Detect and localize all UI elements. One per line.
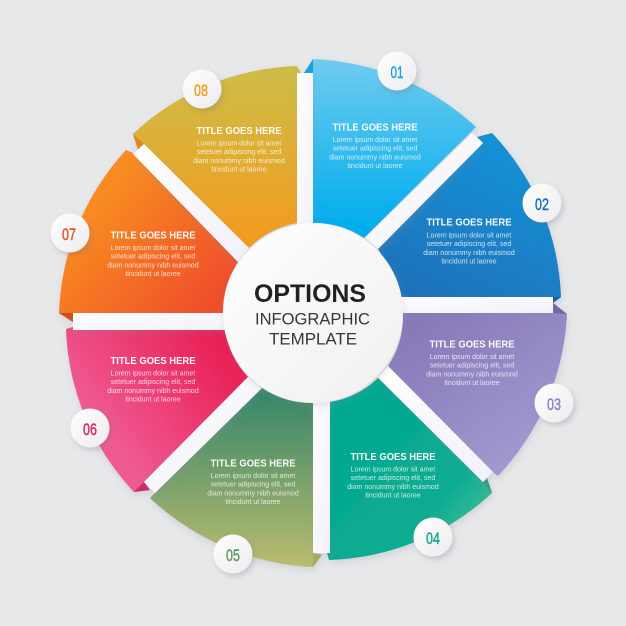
text block: option 03: TITLE GOES HERE [430,340,515,350]
text block: option 04: Lorem ipsum dolor sit amet [351,466,435,474]
text block: option 04 [347,452,439,500]
text block: option 03: diam nonummy nibh euismod [426,371,518,378]
text block: option 02: diam nonummy nibh euismod [423,250,515,257]
text block: option 04: setetuer adipiscing elit, sed [351,475,435,482]
text block: option 02: Lorem ipsum dolor sit amet [427,232,511,240]
text block: option 01: Lorem ipsum dolor sit amet [333,137,417,144]
badge 01 [378,52,416,90]
text block: option 05: Lorem ipsum dolor sit amet [211,473,295,480]
text block: option 02: TITLE GOES HERE [426,218,512,228]
badge 06 [70,408,110,448]
badge 02: 02 [535,195,549,214]
text block: option 01: setetuer adipiscing elit, sed [333,146,417,153]
text block: option 01 [329,122,421,170]
text block: option 07: tincidunt ut laoree [125,271,181,278]
badge 03: 03 [547,395,561,414]
badge 07: 07 [62,225,76,244]
text block: option 07: Lorem ipsum dolor sit amet [111,245,195,252]
panel: option 01 segment [313,59,476,238]
text block: option 04: TITLE GOES HERE [350,452,436,463]
badge 02 [522,184,562,222]
panel: option 04 segment [327,378,492,560]
text block: option 03: tincidunt ut laoree [444,380,500,387]
text block: option 02: tincidunt ut laoree [441,258,497,266]
badge 04: 04 [426,529,440,548]
text block: option 07 [107,230,199,278]
text block: option 03 [426,340,518,387]
text block: option 06: Lorem ipsum dolor sit amet [111,370,195,378]
text block: option 01: diam nonummy nibh euismod [329,154,421,161]
central hub circle [223,223,403,403]
text block: option 06: tincidunt ut laoree [125,396,181,404]
badge 04 [414,518,452,556]
text block: option 01: TITLE GOES HERE [332,122,418,134]
panel: option 02 segment [378,133,561,303]
text block: option 06 [107,356,199,404]
text block: option 04: tincidunt ut laoree [365,492,421,500]
text block: option 02: setetuer adipiscing elit, sed [427,241,511,248]
badge 07 [50,214,90,252]
text block: option 06: diam nonummy nibh euismod [107,388,199,395]
text block: option 07: setetuer adipiscing elit, sed [111,254,195,261]
panel: option 05 segment [150,388,322,567]
text block: option 01: tincidunt ut laoree [347,163,403,170]
heading: TEMPLATE: TEMPLATE [269,329,357,348]
badge 05 [214,534,252,574]
badge 08: 08 [194,81,208,100]
badge 05: 05 [226,546,240,565]
white dividers [73,73,553,553]
text block: option 08: TITLE GOES HERE [196,126,282,137]
panel: option 06 segment [66,327,248,492]
text block: option 03: setetuer adipiscing elit, sed [430,363,514,370]
text block: option 04: diam nonummy nibh euismod [347,484,439,491]
badge 01: 01 [390,63,404,82]
text block: option 08: diam nonummy nibh euismod [193,158,285,165]
panel: option 07 segment [59,150,238,322]
text block: option 08: tincidunt ut laoree [211,166,267,174]
text block: option 02 [423,218,515,266]
heading: INFOGRAPHIC: INFOGRAPHIC [255,309,370,328]
panel: option 03 segment [388,303,567,476]
badge 06: 06 [83,420,97,439]
text block: option 06: setetuer adipiscing elit, sed [111,379,195,386]
badge 03 [534,384,574,422]
text block: option 05 [207,458,299,506]
text block: option 05: diam nonummy nibh euismod [207,490,299,497]
heading: OPTIONS: OPTIONS [254,280,366,308]
text block: option 05: tincidunt ut laoree [225,499,281,506]
panel: option 08 segment [133,66,301,248]
text block: option 08 [193,126,285,174]
badge 08 [182,70,222,108]
text block: option 06: TITLE GOES HERE [110,356,196,367]
text block: option 03: Lorem ipsum dolor sit amet [430,354,514,361]
text block: option 07: diam nonummy nibh euismod [107,262,199,269]
text block: option 07: TITLE GOES HERE [110,230,196,242]
text block: option 05: TITLE GOES HERE [210,458,296,470]
text block: option 08: setetuer adipiscing elit, sed [197,149,281,156]
text block: option 08: Lorem ipsum dolor sit amet [197,140,281,148]
text block: option 05: setetuer adipiscing elit, sed [211,482,295,489]
icon: corner folds [59,59,567,567]
